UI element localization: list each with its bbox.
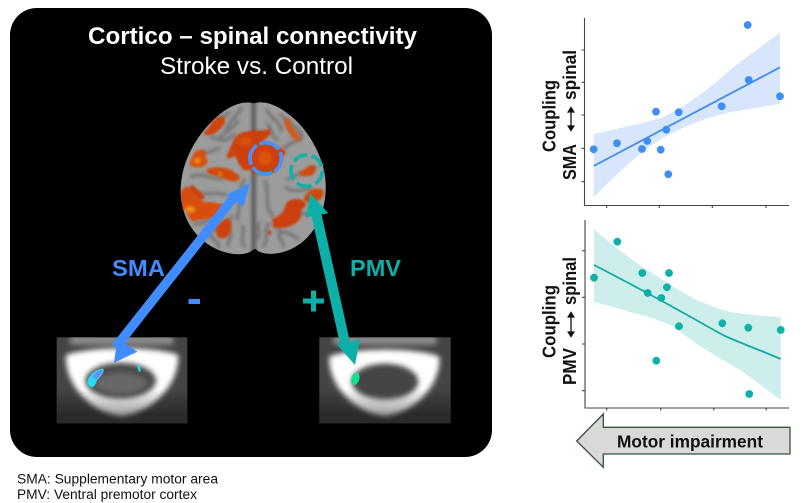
arrow: motor impairment: Motor impairment [617, 432, 763, 452]
spinal cord slice: right [319, 335, 451, 423]
y-axis label: SMA [560, 144, 580, 180]
y-axis label: spinal [560, 257, 580, 305]
y-axis label [540, 50, 580, 180]
y-axis label: Coupling [540, 285, 560, 358]
subtitle: Stroke vs. Control [160, 53, 353, 80]
y-axis label [540, 257, 580, 385]
sign: minus [188, 299, 200, 304]
axes [582, 18, 789, 208]
label: PMV: PMV [350, 255, 401, 281]
arrow: PMV double-headed [306, 193, 360, 365]
ROI ring: PMV [291, 155, 322, 186]
data points [590, 21, 784, 178]
spinal cord slice: left [57, 335, 187, 423]
title: Cortico – spinal connectivity [88, 23, 417, 50]
arrow: motor impairment [577, 414, 790, 467]
cluster: SMA spinal left [88, 369, 104, 387]
brain axial slice with activation [180, 100, 326, 257]
y-axis label: PMV [560, 348, 580, 385]
regression line [594, 265, 781, 359]
data points [590, 238, 785, 398]
footnote: abbreviations [17, 472, 218, 502]
chart: SMA coupling vs motor impairment [540, 18, 789, 208]
label: SMA: SMA [112, 255, 165, 281]
sign: plus [303, 290, 324, 312]
footnote: abbreviations: PMV: Ventral premotor cortex [17, 487, 197, 502]
ROI ring: SMA [250, 143, 281, 174]
cluster: PMV spinal [350, 372, 361, 386]
regression line [594, 67, 780, 166]
arrow: SMA double-headed [114, 183, 250, 363]
confidence band [594, 229, 781, 400]
y-axis label: Coupling [540, 80, 560, 152]
confidence band [594, 33, 780, 197]
chart: PMV coupling vs motor impairment [540, 220, 789, 410]
cluster: SMA spinal right [137, 366, 141, 372]
axes [582, 220, 789, 410]
y-axis label: spinal [560, 50, 580, 100]
footnote: abbreviations: SMA: Supplementary motor area [17, 472, 218, 486]
panel: black connectivity panel [10, 8, 492, 457]
